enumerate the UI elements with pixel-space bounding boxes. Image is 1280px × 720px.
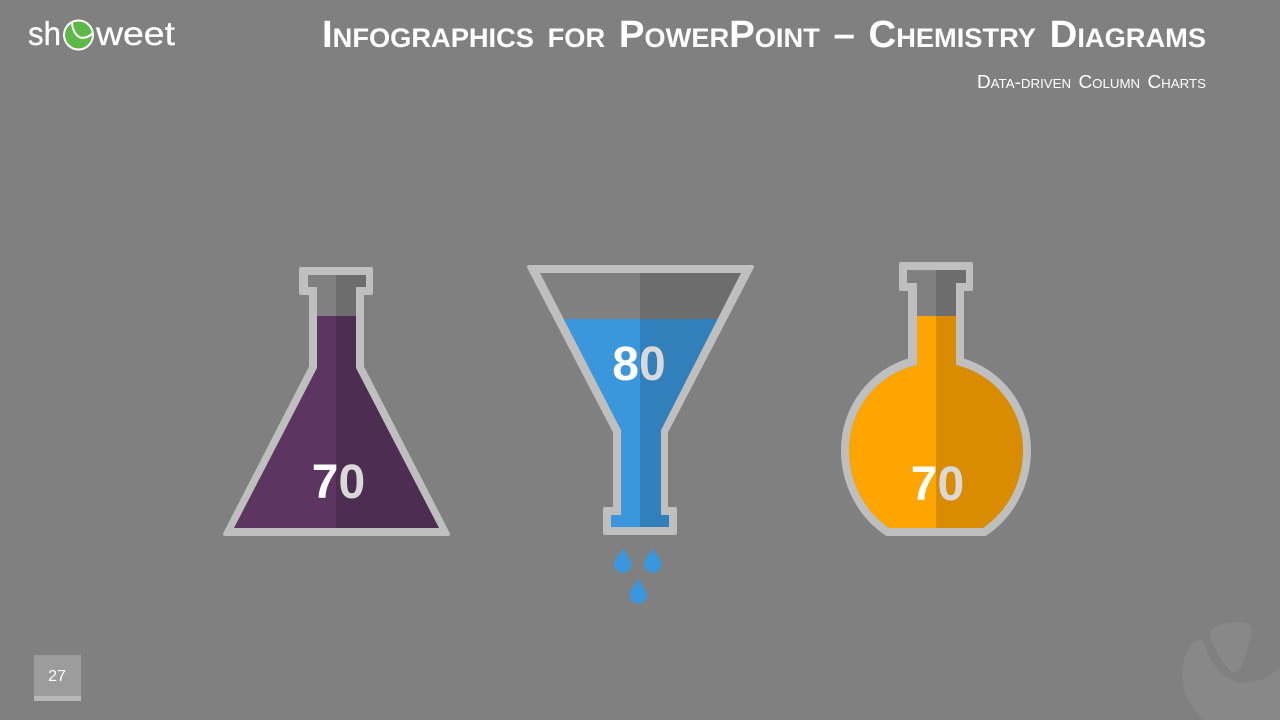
chart: round flask value 70 [840,255,1036,540]
page number: 27 [48,668,66,685]
watermark logo [1182,623,1280,720]
page number [34,655,81,701]
value: 70: 70 [911,458,964,511]
title: Infographics for PowerPoint – Chemistry Diagrams [322,14,1206,56]
value: 70: 70 [312,456,365,509]
logo: sh [28,15,61,52]
subtitle: Data-driven Column Charts [977,71,1206,92]
icon: logo circle [63,20,94,50]
chart: conical flask value 70 [220,260,456,540]
icon: falling drops [614,548,662,604]
logo: weet [95,15,175,52]
logo [28,15,175,52]
chart: funnel value 80 [525,260,760,540]
value: 80: 80 [612,338,666,391]
